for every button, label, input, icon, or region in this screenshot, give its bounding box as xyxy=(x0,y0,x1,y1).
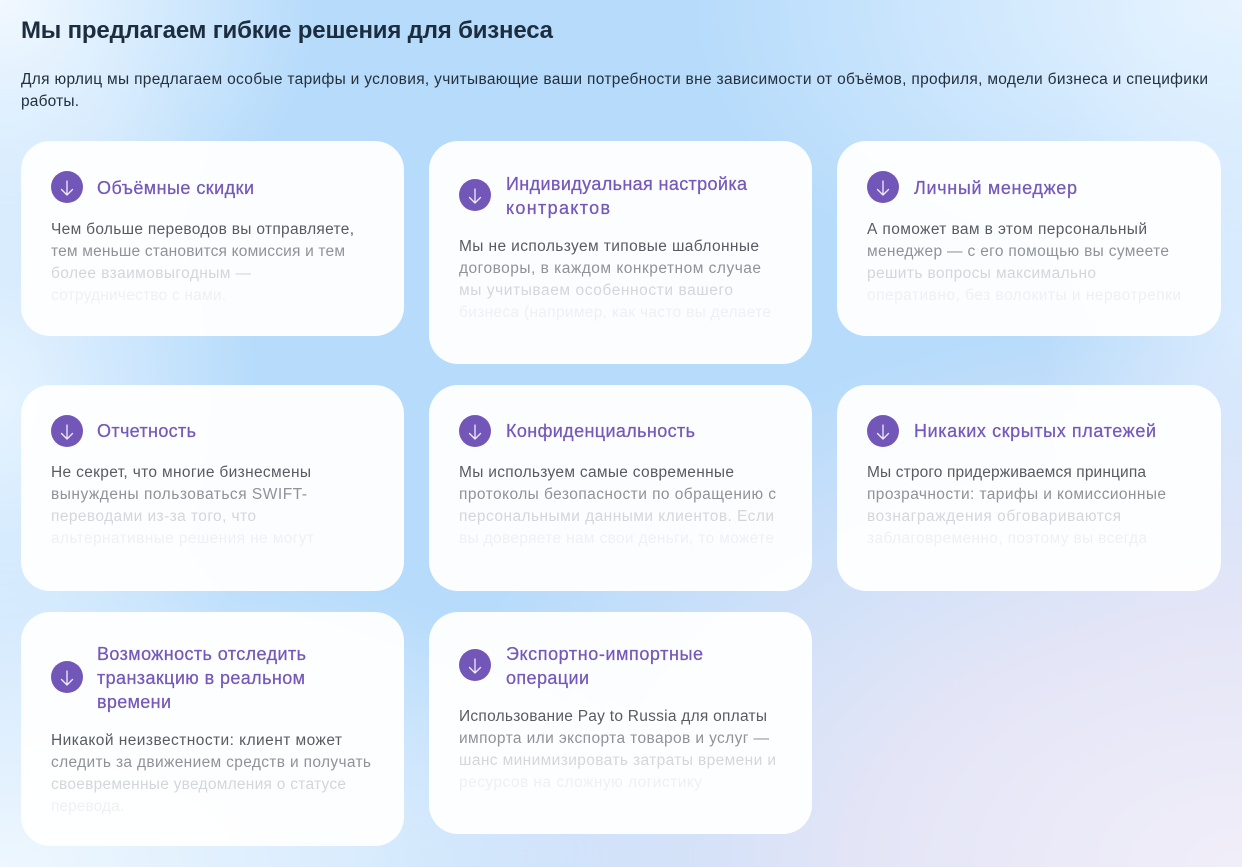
description: следить за движением средств и получать xyxy=(51,754,371,771)
heading: Объёмные скидки xyxy=(97,178,254,198)
panel: real-time tracking xyxy=(21,612,404,846)
icon: arrow down xyxy=(459,415,491,447)
description: А поможет вам в этом персональный xyxy=(867,221,1147,238)
panel: export-import operations xyxy=(429,612,812,834)
heading xyxy=(506,174,748,218)
heading: Возможность отследить xyxy=(97,644,306,664)
description: персональными данными клиентов. Если xyxy=(459,508,774,525)
description: вы доверяете нам свои деньги, то можете xyxy=(459,530,774,547)
description: договоры, в каждом конкретном случае xyxy=(459,260,761,277)
icon: arrow down xyxy=(867,171,899,203)
description: более взаимовыгодным — xyxy=(51,265,252,282)
panel: individual contracts xyxy=(429,141,812,364)
description: заблаговременно, поэтому вы всегда xyxy=(867,530,1147,547)
heading xyxy=(506,644,703,688)
description: решить вопросы максимально xyxy=(867,265,1096,282)
description: бизнеса (например, как часто вы делаете xyxy=(459,304,771,321)
heading: Индивидуальная настройка xyxy=(506,174,748,194)
description: вынуждены пользоваться SWIFT- xyxy=(51,486,307,503)
description: прозрачности: тарифы и комиссионные xyxy=(867,486,1166,503)
description xyxy=(459,238,771,321)
panel: confidentiality xyxy=(429,385,812,591)
intro text: Для юрлиц мы предлагаем особые тарифы и условия, учитывающие ваши потребности вне зависимости от объёмов, профиля, модели бизнеса и специфики xyxy=(21,71,1208,88)
heading: Отчетность xyxy=(97,421,196,441)
description: вознаграждения обговариваются xyxy=(867,508,1121,525)
description: Мы используем самые современные xyxy=(459,464,734,481)
description xyxy=(867,464,1166,547)
description xyxy=(459,464,776,547)
heading: Никаких скрытых платежей xyxy=(914,421,1156,441)
panel: reporting xyxy=(21,385,404,591)
icon: arrow down xyxy=(51,415,83,447)
description xyxy=(459,708,776,791)
icon: arrow down xyxy=(51,661,83,693)
panel: volume discounts xyxy=(21,141,404,336)
title: Мы предлагаем гибкие решения для бизнеса xyxy=(21,17,554,44)
icon: arrow down xyxy=(459,649,491,681)
description: Не секрет, что многие бизнесмены xyxy=(51,464,311,481)
description: перевода. xyxy=(51,798,124,815)
description: Никакой неизвестности: клиент может xyxy=(51,732,342,749)
description: Мы не используем типовые шаблонные xyxy=(459,238,759,255)
description: альтернативные решения не могут xyxy=(51,530,314,547)
heading xyxy=(97,644,306,712)
icon: arrow down xyxy=(51,171,83,203)
description xyxy=(51,221,354,304)
description: оперативно, без волокиты и нервотрепки xyxy=(867,287,1181,304)
description: мы учитываем особенности вашего xyxy=(459,282,733,299)
description xyxy=(51,732,371,815)
description: Чем больше переводов вы отправляете, xyxy=(51,221,354,238)
heading: операции xyxy=(506,668,589,688)
description: импорта или экспорта товаров и услуг — xyxy=(459,730,770,747)
description: протоколы безопасности по обращению с xyxy=(459,486,776,503)
heading: времени xyxy=(97,692,171,712)
description: своевременные уведомления о статусе xyxy=(51,776,346,793)
heading: транзакцию в реальном xyxy=(97,668,305,688)
description: Использование Pay to Russia для оплаты xyxy=(459,708,767,725)
description xyxy=(51,464,314,547)
description xyxy=(867,221,1181,304)
intro text: работы. xyxy=(21,93,79,110)
description: сотрудничество с нами. xyxy=(51,287,226,304)
panel: no hidden fees xyxy=(837,385,1221,591)
description: переводами из-за того, что xyxy=(51,508,256,525)
heading: Личный менеджер xyxy=(914,178,1077,198)
description: Мы строго придерживаемся принципа xyxy=(867,464,1146,481)
intro text xyxy=(21,71,1208,110)
panel: personal manager xyxy=(837,141,1221,336)
description: менеджер — с его помощью вы сумеете xyxy=(867,243,1169,260)
heading: контрактов xyxy=(506,198,610,218)
description: тем меньше становится комиссия и тем xyxy=(51,243,345,260)
heading: Конфиденциальность xyxy=(506,421,695,441)
description: шанс минимизировать затраты времени и xyxy=(459,752,776,769)
heading: Экспортно-импортные xyxy=(506,644,703,664)
icon: arrow down xyxy=(459,179,491,211)
icon: arrow down xyxy=(867,415,899,447)
description: ресурсов на сложную логистику xyxy=(459,774,702,791)
